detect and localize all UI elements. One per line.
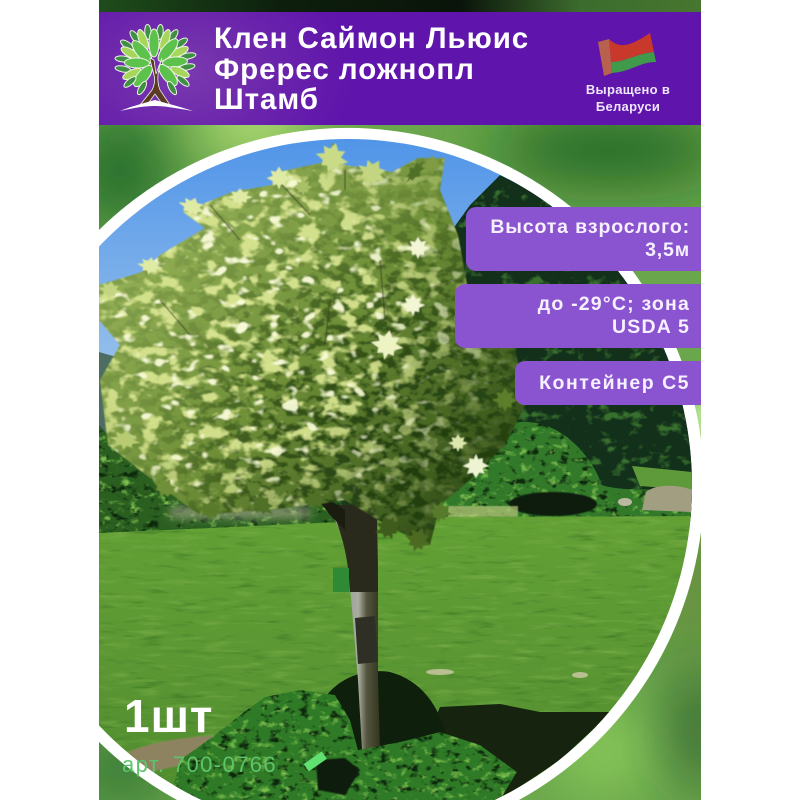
spec: mature height: Высота взрослого: bbox=[490, 216, 690, 238]
title: Клен Саймон Льюис bbox=[214, 22, 529, 55]
individual leaves bbox=[97, 139, 518, 557]
title bbox=[214, 22, 529, 116]
background trees bbox=[99, 175, 700, 520]
spec: hardiness zone: до -29°С; зона bbox=[538, 293, 690, 315]
spec: container bbox=[515, 361, 701, 405]
logo: tree bbox=[114, 24, 196, 111]
grown in Belarus caption: Выращено в bbox=[586, 82, 670, 97]
circular photo bbox=[97, 130, 701, 800]
spec: mature height: 3,5м bbox=[645, 239, 690, 261]
spec: mature height bbox=[466, 207, 701, 271]
spec: hardiness zone: USDA 5 bbox=[612, 316, 690, 338]
stone edging bbox=[128, 735, 214, 772]
left shrubs bbox=[99, 425, 345, 540]
lawn bbox=[99, 516, 700, 800]
title: Фререс ложнопл bbox=[214, 52, 475, 86]
trunk bbox=[322, 502, 380, 750]
spec: container: Контейнер С5 bbox=[539, 372, 690, 394]
top dark strip bbox=[99, 0, 701, 13]
grown in Belarus caption bbox=[586, 82, 670, 114]
spec: hardiness zone bbox=[455, 284, 701, 348]
foreground bushes bbox=[170, 690, 517, 800]
plant label on trunk bbox=[333, 568, 349, 592]
right shrubs and rocks bbox=[442, 422, 692, 518]
grown in Belarus caption: Беларуси bbox=[596, 99, 660, 114]
flag of Belarus bbox=[598, 33, 656, 76]
tree shadow on ground bbox=[438, 704, 609, 800]
branches bbox=[160, 170, 385, 345]
sky bbox=[99, 139, 669, 361]
title: Штамб bbox=[214, 83, 319, 116]
header banner bbox=[99, 12, 701, 125]
tree crown bbox=[97, 139, 528, 557]
dark bush behind trunk bbox=[328, 671, 445, 750]
quantity: 1шт bbox=[124, 690, 213, 742]
article number: арт. 700-0766 bbox=[122, 752, 277, 777]
plastic tag bbox=[304, 751, 327, 771]
product card bbox=[99, 0, 701, 800]
photo scene with tree bbox=[99, 0, 701, 800]
blurred green backdrop bbox=[99, 125, 701, 800]
white circle ring bbox=[99, 128, 701, 800]
scene base bbox=[140, 405, 692, 530]
